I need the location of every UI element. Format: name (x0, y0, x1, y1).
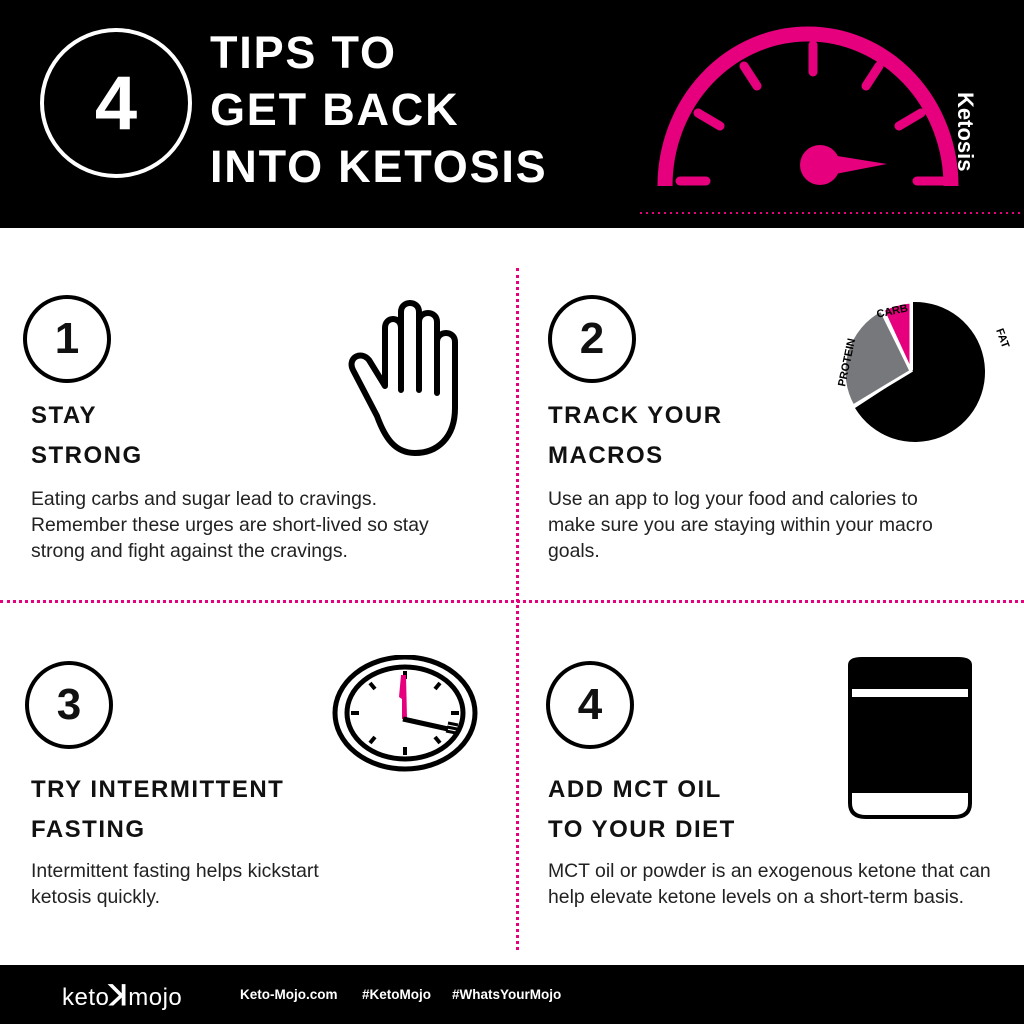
heading 3: FASTING (31, 816, 146, 843)
text 2: Use an app to log your food and calories to (548, 488, 918, 510)
number 2: 2 (580, 314, 604, 363)
text 1: Eating carbs and sugar lead to cravings. (31, 488, 377, 510)
icon: hand (348, 300, 458, 456)
header number circle (40, 28, 192, 178)
pie chart: CARB (875, 302, 909, 321)
heading 1 (31, 402, 143, 469)
icon: gauge: Ketosis (953, 92, 978, 171)
heading 4 (548, 776, 736, 843)
footer (0, 965, 1024, 1024)
icon: clock (332, 655, 478, 772)
icon: gauge (640, 26, 1020, 214)
text 1 (31, 488, 429, 562)
text 1: strong and fight against the cravings. (31, 540, 348, 562)
heading 3: TRY INTERMITTENT (31, 776, 284, 803)
title: GET BACK (210, 84, 459, 135)
dividers (516, 268, 519, 950)
heading 3 (31, 776, 284, 843)
text 4: MCT oil or powder is an exogenous ketone that can (548, 860, 991, 882)
pie chart (836, 302, 1011, 442)
text 3 (31, 860, 319, 908)
text 4 (548, 860, 991, 908)
number 3: 3 (57, 680, 81, 729)
panel: tip 1 (23, 295, 458, 562)
text 1: Remember these urges are short-lived so stay (31, 514, 429, 536)
header band (0, 0, 1024, 228)
number 2 (548, 295, 636, 383)
number 4: 4 (578, 680, 602, 729)
footer links: Keto-Mojo.com (240, 987, 338, 1002)
footer links: #KetoMojo (362, 987, 431, 1002)
heading 1: STAY (31, 402, 97, 429)
title: INTO KETOSIS (210, 141, 548, 192)
number 1 (23, 295, 111, 383)
number 4 (546, 661, 634, 749)
heading 2 (548, 402, 723, 469)
heading 4: ADD MCT OIL (548, 776, 722, 803)
panel: tip 2 (548, 295, 1011, 562)
text 2: make sure you are staying within your macro (548, 514, 933, 536)
heading 4: TO YOUR DIET (548, 816, 736, 843)
pie chart: FAT (993, 327, 1011, 350)
pie chart: PROTEIN (836, 337, 858, 388)
panel: tip 3 (25, 655, 478, 908)
number 3 (25, 661, 113, 749)
text 2: goals. (548, 540, 600, 562)
number 1: 1 (55, 314, 79, 363)
heading 2: TRACK YOUR (548, 402, 723, 429)
heading 2: MACROS (548, 442, 664, 469)
title: TIPS TO (210, 27, 397, 78)
icon: jar (848, 657, 972, 819)
footer links (240, 987, 561, 1002)
title (210, 27, 548, 192)
footer links: #WhatsYourMojo (452, 987, 561, 1002)
logo: ketoꓘmojo (62, 980, 182, 1011)
text 3: Intermittent fasting helps kickstart (31, 860, 319, 882)
text 3: ketosis quickly. (31, 886, 160, 908)
header number circle: 4 (95, 60, 137, 146)
text 2 (548, 488, 933, 562)
heading 1: STRONG (31, 442, 143, 469)
panel: tip 4 (546, 657, 991, 908)
text 4: help elevate ketone levels on a short-term basis. (548, 886, 964, 908)
